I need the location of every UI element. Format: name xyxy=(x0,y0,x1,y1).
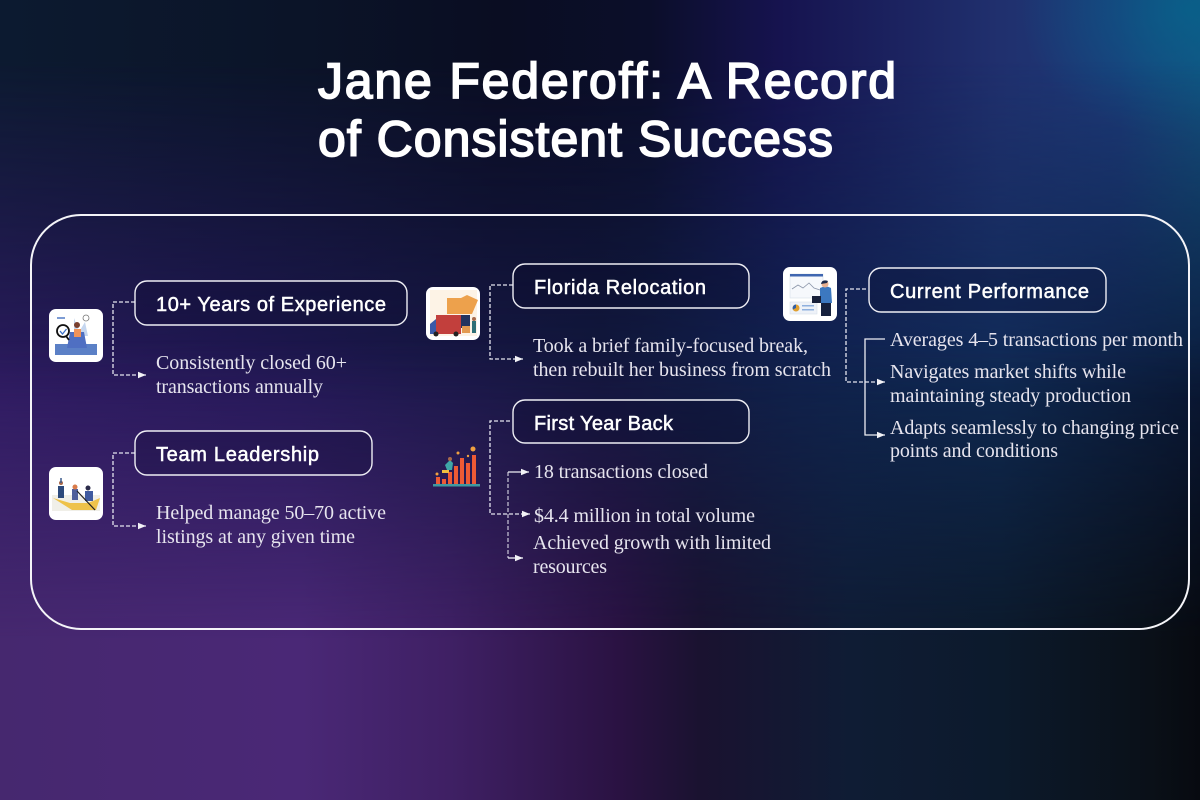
text: current performance details: points and conditions xyxy=(890,440,1058,462)
icon: analyst with charts xyxy=(783,267,837,321)
heading box: florida relocation: Florida Relocation xyxy=(534,277,706,299)
heading box: team leadership: Team Leadership xyxy=(156,444,319,466)
section: first year back xyxy=(433,400,771,578)
section: florida relocation xyxy=(426,264,831,381)
text: current performance details: Navigates market shifts while xyxy=(890,361,1126,383)
text: team leadership detail: listings at any given time xyxy=(156,526,355,548)
connector: florida relocation xyxy=(490,285,523,359)
text: first year back details xyxy=(533,461,771,578)
icon: team rowing boat xyxy=(49,467,103,520)
section: 10+ years of experience xyxy=(49,281,407,398)
text: current performance details xyxy=(890,329,1183,462)
text: first year back details: 18 transactions closed xyxy=(534,461,708,483)
text: experience detail xyxy=(156,352,347,398)
connector: experience xyxy=(113,302,146,375)
text: first year back details: Achieved growth with limited xyxy=(533,532,771,554)
heading box: current performance: Current Performance xyxy=(890,281,1089,303)
connector: first year back outer xyxy=(490,421,530,514)
section: current performance xyxy=(783,267,1183,462)
text: florida relocation detail: then rebuilt her business from scratch xyxy=(533,359,831,381)
icon: moving truck xyxy=(426,287,480,340)
icon: person with magnifying glass xyxy=(49,309,103,362)
heading box: current performance xyxy=(869,268,1106,312)
text: team leadership detail: Helped manage 50–70 active xyxy=(156,502,386,524)
connector: first year back inner xyxy=(508,472,529,558)
panel: main container xyxy=(31,215,1189,629)
text: experience detail: transactions annually xyxy=(156,376,323,398)
heading box: team leadership xyxy=(135,431,372,475)
icon: bar chart with person xyxy=(433,446,480,486)
text: first year back details: $4.4 million in total volume xyxy=(534,505,755,527)
text: current performance details: maintaining steady production xyxy=(890,385,1131,407)
section: team leadership xyxy=(49,431,386,548)
text: first year back details: resources xyxy=(533,556,607,578)
text: florida relocation detail xyxy=(533,335,831,381)
text: florida relocation detail: Took a brief family-focused break, xyxy=(533,335,808,357)
heading box: experience xyxy=(135,281,407,325)
text: team leadership detail xyxy=(156,502,386,548)
heading box: experience: 10+ Years of Experience xyxy=(156,294,386,316)
connector: current performance outer xyxy=(846,289,885,382)
title xyxy=(318,53,896,167)
connector: team leadership xyxy=(113,453,146,526)
heading box: first year back xyxy=(513,400,749,443)
heading box: first year back: First Year Back xyxy=(534,413,674,435)
text: current performance details: Averages 4–5 transactions per month xyxy=(890,329,1183,351)
text: current performance details: Adapts seamlessly to changing price xyxy=(890,417,1179,439)
text: experience detail: Consistently closed 60+ xyxy=(156,352,347,374)
connector: current performance inner xyxy=(865,339,885,435)
title: of Consistent Success xyxy=(318,111,833,167)
heading box: florida relocation xyxy=(513,264,749,308)
title: Jane Federoff: A Record xyxy=(318,53,896,109)
